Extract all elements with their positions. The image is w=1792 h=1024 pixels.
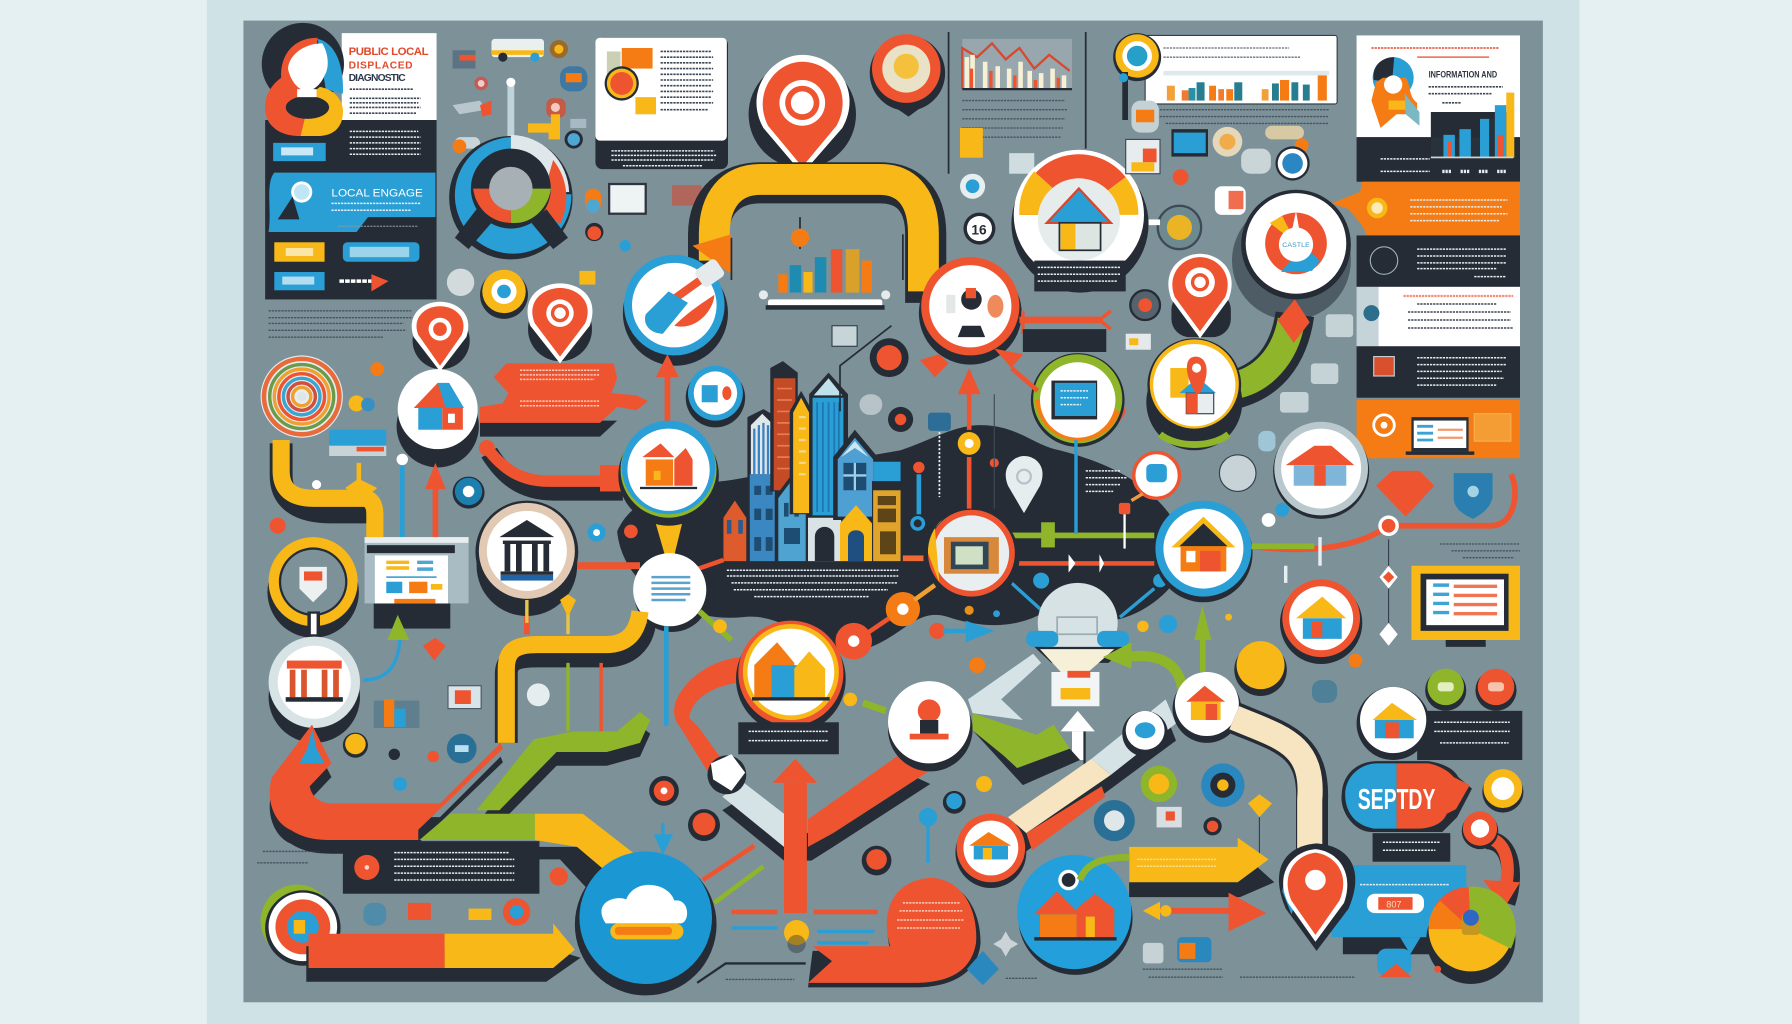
pin: right red [1168,254,1232,338]
building: blue tall left [747,409,777,562]
arrow: left yellow elbow [281,440,377,537]
callout: blue box with pin [1331,865,1466,969]
arrow: olive curve [1229,299,1310,391]
node: pillars circle [269,637,360,743]
panel: profile card: DIAGNOSTIC [349,73,406,84]
building: blue skyscraper [809,373,848,517]
node: yellow ring [267,537,359,638]
panel: profile card: DISPLACED [349,61,413,72]
chart: bars on a pedestal [731,217,903,310]
cluster: top-left small icons [453,39,587,153]
node: yellow dot and small [1225,614,1362,703]
button: blue small [274,272,325,290]
panel: white note [1378,287,1520,346]
node: spiral rings [261,355,343,438]
button: yellow [274,242,325,262]
node: house with yellow stem [618,421,719,560]
icons: top chips [960,128,1034,245]
panel: profile card [262,23,437,299]
arrow: cream path [1234,718,1312,857]
arrow: yellow arch [693,179,926,303]
arrow: yellow stepped [506,594,645,743]
icons: top chips: 16 [971,222,987,237]
building: yellow arch house [840,505,872,561]
card: top chart [1113,33,1337,133]
node: house in circle center right [1154,501,1253,602]
text block: left lines [269,311,411,337]
node: pin house [1146,338,1242,450]
node: donut chart [1232,190,1351,320]
icons: center cluster above blob [832,326,999,529]
card: center-left web page [365,537,469,629]
node: map circle [835,621,994,771]
pin: white in blob [1006,456,1043,513]
chart: top bars [949,32,1086,174]
arrow: green up [363,615,446,680]
arrows: up thin [312,454,446,537]
arrow: red lower curve [479,440,627,491]
node: house small [1122,672,1241,757]
icons: upper right row [1126,126,1310,249]
node: blue cloud circle [550,776,720,995]
pin: big red [1279,843,1355,951]
icon: person portrait [265,38,343,136]
arrow: large red left [270,725,503,854]
banner: orange laptop [1357,400,1520,458]
pill: SEPTDY: SEPTDY [1358,784,1435,816]
chart: tall bars [1431,93,1514,158]
node: houses small circle [955,814,1026,888]
node: houses circle center [736,621,846,754]
bottom center connectors [697,846,1038,985]
icon: portrait [1371,57,1419,128]
node: gears and small icons [862,763,1272,875]
node: central map pin circle [919,257,1111,391]
chart: bottom-right pie [1377,887,1516,984]
connector right line [1251,474,1520,646]
callout: blue box with pin: 807 [1386,899,1402,909]
building: blue gabled house [833,430,878,520]
icons: small left cluster [270,362,638,542]
button: top [273,143,326,161]
node: large house right [1273,422,1369,519]
node: center screen [857,510,1019,640]
banner: blue [269,173,435,232]
arrow: diagonal cream band [1008,699,1176,851]
node: dome device [1026,583,1177,779]
illustration: city skyline [720,361,926,597]
pin: left two [528,283,592,363]
pill: SEPTDY [1341,761,1472,862]
arrow: yellow sweep to cloud [419,814,665,909]
node: doc near reflection [1126,290,1353,501]
icons: small left middle [343,683,550,791]
node: blue house circle [1017,855,1133,975]
building: orange tower [790,391,813,514]
connector lines [1011,440,1167,617]
node: donut chart: CASTLE [1282,242,1310,249]
button: blue wide [343,242,419,262]
heading: card title: PUBLIC LOCAL [349,46,429,58]
pin: top red [749,55,856,174]
chart: donut dial [449,78,573,259]
building: blue house middle [775,474,809,562]
pin: left one [412,302,470,371]
shapes: diamond and shield [1376,471,1493,519]
node: bottom left circle and arrow [261,885,581,982]
arrow: red up large [674,657,930,913]
callout: bubble red [808,878,981,987]
node: white list circle [633,553,731,726]
panel: profile card: LOCAL ENGAGE [331,188,423,200]
panel: right column: INFORMATION AND [1429,70,1497,80]
banner: orange tag [1331,182,1520,235]
arrow: yellow right [1080,838,1274,897]
arrow: red banner arrow [480,363,648,437]
nodes: green and red dots [1425,669,1517,711]
pin: top right small [870,34,945,117]
building: yellow block [872,481,902,562]
box: dark caption [257,841,539,894]
arrow: olive big curve [477,712,650,824]
monitor [1411,566,1520,647]
arrow: up to small circle [656,354,679,423]
node: small doc circle [686,366,745,427]
node: house right mid [1280,579,1362,664]
node: bank circle [475,501,640,634]
panel: top note card [595,38,728,169]
arrow: double thin [1143,893,1354,977]
node: tool circle [623,255,728,366]
node: house bottom right with box [1357,687,1522,760]
nodes: right bottom rings [1462,769,1523,909]
small icons under dial [447,184,702,319]
node: large house gauge [1011,150,1149,293]
arrow: mini [339,274,389,291]
panel: right column [1331,35,1520,458]
building: arch gate [808,518,841,561]
node: house circle left [397,369,479,467]
building: red tower [770,361,798,491]
dark central blob [617,425,1185,652]
building: red small house [720,494,750,562]
node: laptop circle [1031,353,1126,447]
arrow: green and grey chevrons [968,606,1211,785]
panel: main background [243,21,1543,1002]
